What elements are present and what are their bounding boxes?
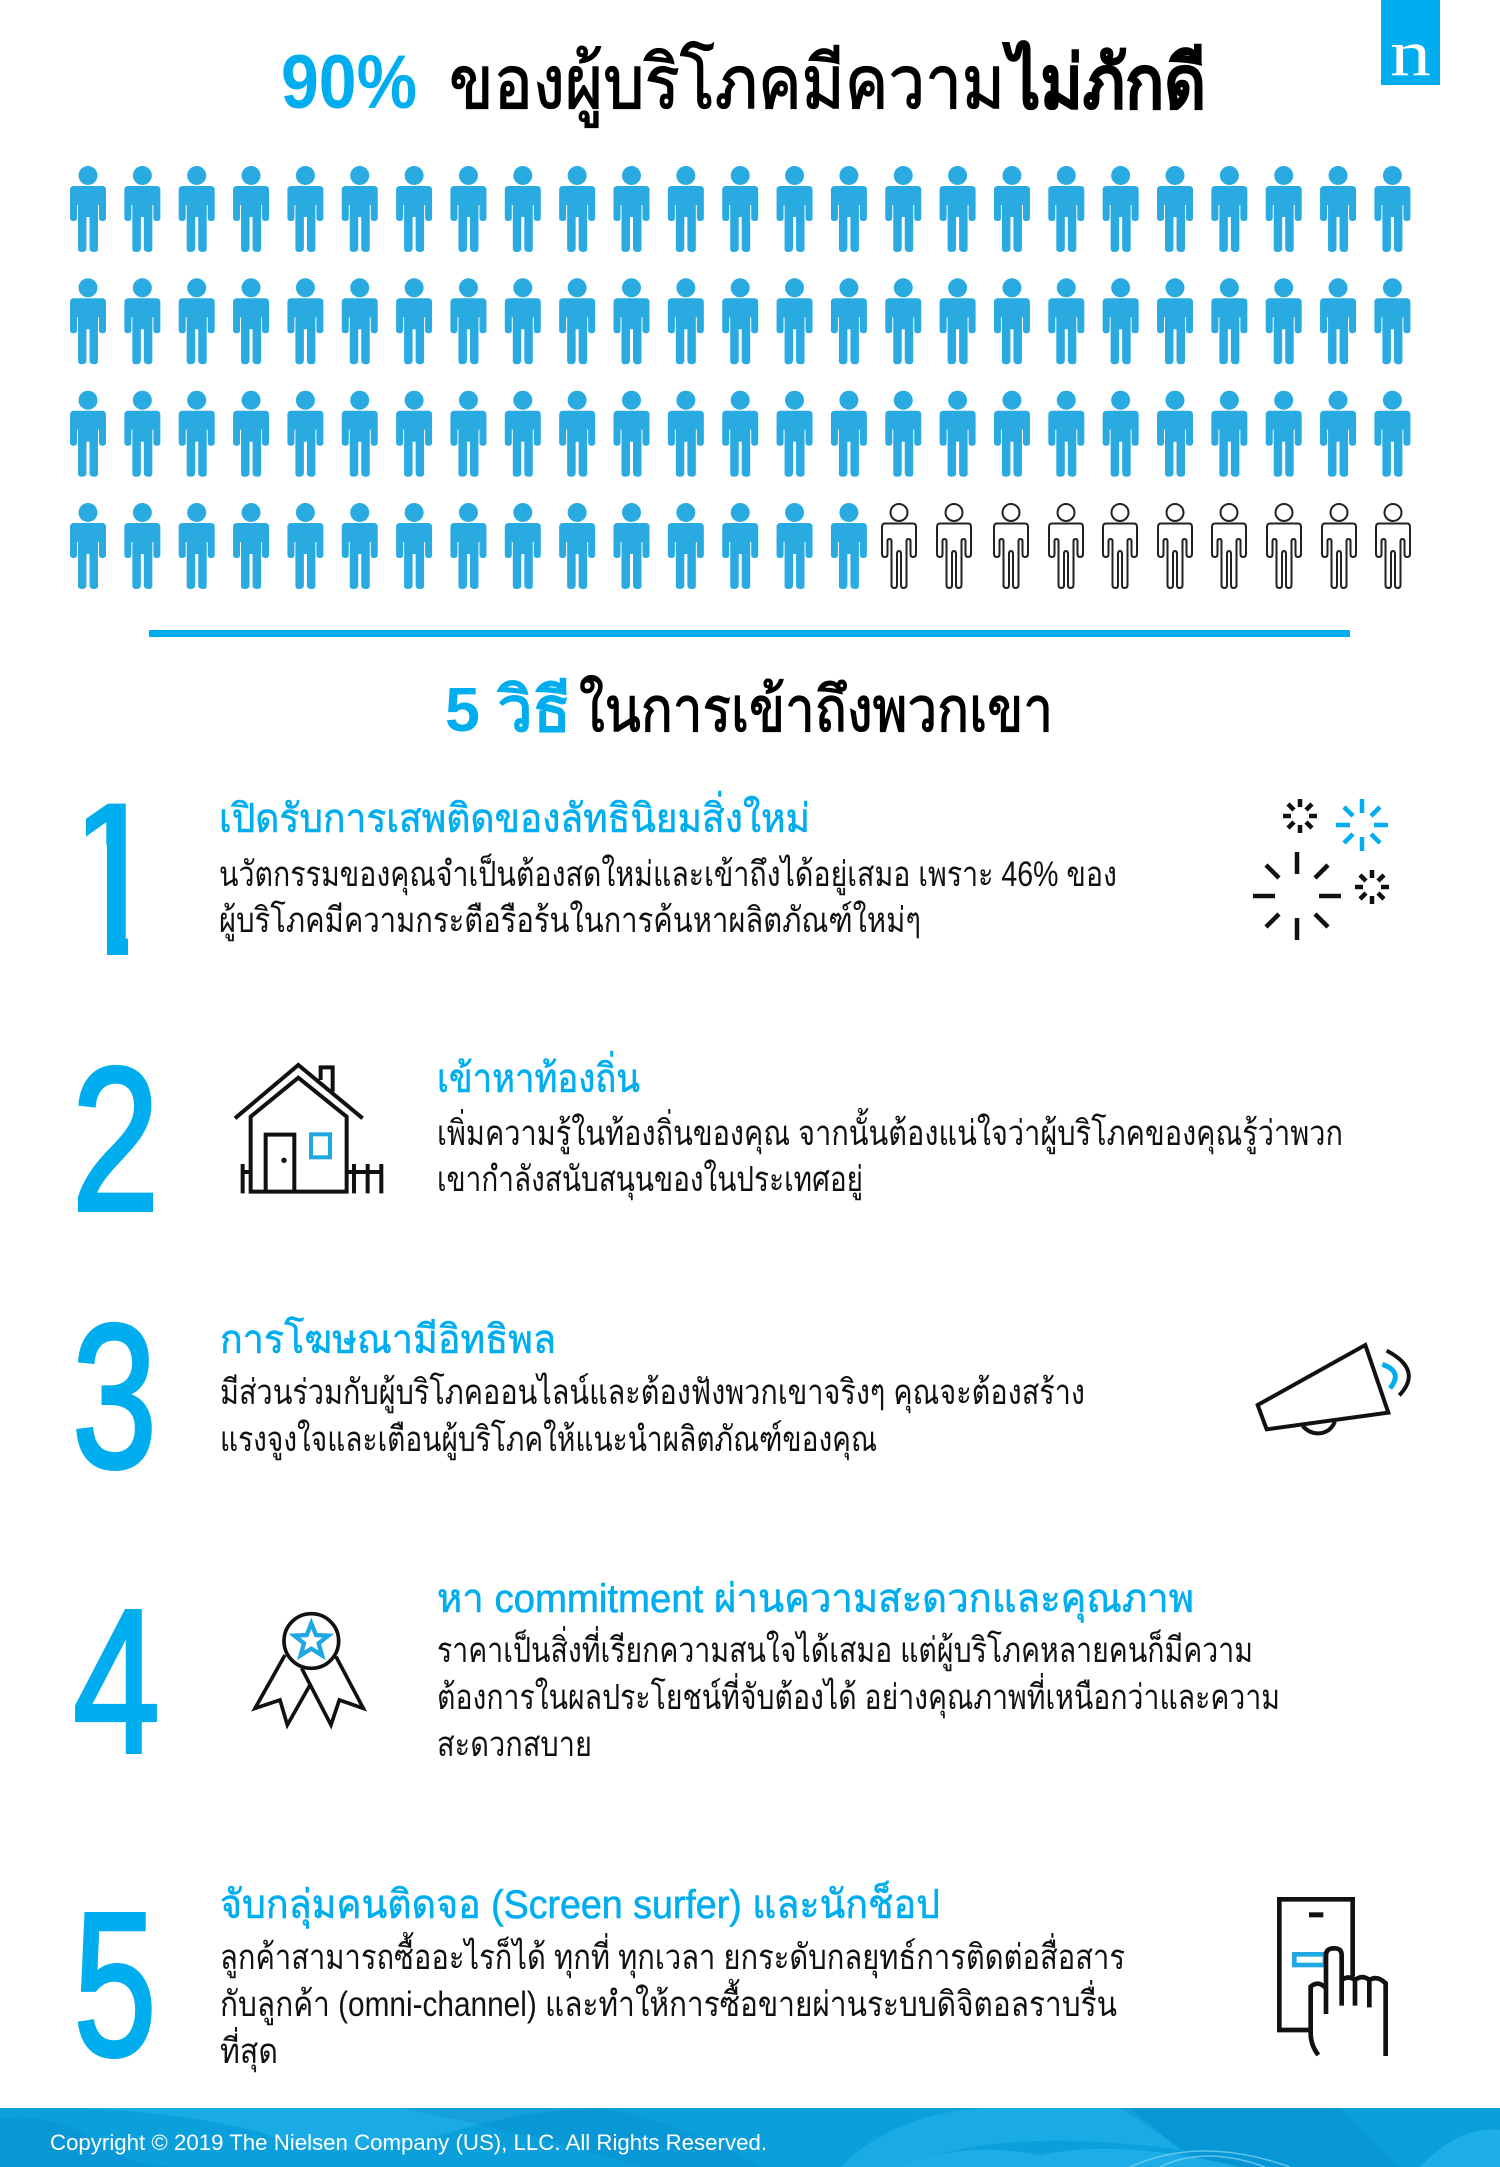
heading 1: เปิดรับการเสพติดของลัทธินิยมสิ่งใหม่ — [219, 791, 810, 841]
body 5: ที่สุด — [220, 2027, 278, 2072]
body 4: ราคาเป็นสิ่งที่เรียกความสนใจได้เสมอ แต่ผู้บริโภคหลายคนก็มีความ — [437, 1626, 1253, 1671]
heading 3: การโฆษณามีอิทธิพล — [220, 1317, 556, 1362]
body 3: มีส่วนร่วมกับผู้บริโภคออนไลน์และต้องฟังพวกเขาจริงๆ คุณจะต้องสร้าง — [220, 1372, 1085, 1413]
body 5 — [220, 1931, 1125, 2072]
number 2: 2 — [72, 1025, 160, 1254]
heading 2: เข้าหาท้องถิ่น — [437, 1051, 640, 1101]
body 4: สะดวกสบาย — [437, 1725, 592, 1764]
body 2: เขากำลังสนับสนุนของในประเทศอยู่ — [437, 1159, 863, 1200]
body 3: แรงจูงใจและเตือนผู้บริโภคให้แนะนำผลิตภัณฑ์ของคุณ — [220, 1419, 877, 1460]
item 2 — [72, 1025, 1343, 1254]
footer band — [0, 2108, 1500, 2167]
body 1: นวัตกรรมของคุณจำเป็นต้องสดใหม่และเข้าถึงได้อยู่เสมอ เพราะ 46% ของ — [219, 853, 1117, 895]
title: 90% — [281, 40, 417, 125]
icon: award ribbon — [255, 1614, 363, 1725]
item 1 — [86, 790, 1389, 955]
body 1 — [219, 853, 1117, 941]
item 5 — [74, 1870, 1386, 2099]
body 5: กับลูกค้า (omni-channel) และทำให้การซื้อขายผ่านระบบดิจิตอลราบรื่น — [220, 1978, 1117, 2025]
item 3 — [72, 1282, 1409, 1511]
number 1: 1 — [51, 756, 173, 1002]
body 1: ผู้บริโภคมีความกระตือรือร้นในการค้นหาผลิตภัณฑ์ใหม่ๆ — [219, 900, 921, 941]
body 2 — [437, 1107, 1343, 1200]
body 4 — [437, 1626, 1280, 1764]
number 5: 5 — [74, 1870, 156, 2099]
logo: Nielsen n: n — [1390, 17, 1431, 90]
title: ไม่ภักดี — [1002, 39, 1206, 124]
subtitle: ในการเข้าถึงพวกเขา — [579, 675, 1053, 745]
logo: Nielsen n — [1381, 0, 1440, 90]
icon: megaphone — [1258, 1345, 1409, 1433]
item 4 — [73, 1567, 1280, 1796]
number 3: 3 — [72, 1282, 157, 1511]
icon: hand tapping phone — [1279, 1899, 1386, 2056]
heading 4: หา commitment ผ่านความสะดวกและคุณภาพ — [437, 1577, 1194, 1623]
title: ของผู้บริโภคมีความ — [449, 41, 1005, 128]
heading 5: จับกลุ่มคนติดจอ (Screen surfer) และนักช็อป — [220, 1880, 940, 1929]
body 3 — [220, 1372, 1085, 1460]
icon: house — [235, 1065, 381, 1193]
title — [281, 39, 1206, 128]
subtitle: 5 วิธี — [445, 676, 571, 745]
number 4: 4 — [73, 1567, 160, 1796]
body 5: ลูกค้าสามารถซื้ออะไรก็ได้ ทุกที่ ทุกเวลา ยกระดับกลยุทธ์การติดต่อสื่อสาร — [220, 1931, 1125, 1978]
body 4: ต้องการในผลประโยชน์ที่จับต้องได้ อย่างคุณภาพที่เหนือกว่าและความ — [437, 1673, 1280, 1718]
pictogram: 90 of 100 people — [70, 166, 1410, 589]
copyright text: Copyright © 2019 The Nielsen Company (US), LLC. All Rights Reserved. — [50, 2130, 767, 2155]
icon: sparkles — [1253, 799, 1389, 940]
subtitle — [445, 675, 1053, 745]
